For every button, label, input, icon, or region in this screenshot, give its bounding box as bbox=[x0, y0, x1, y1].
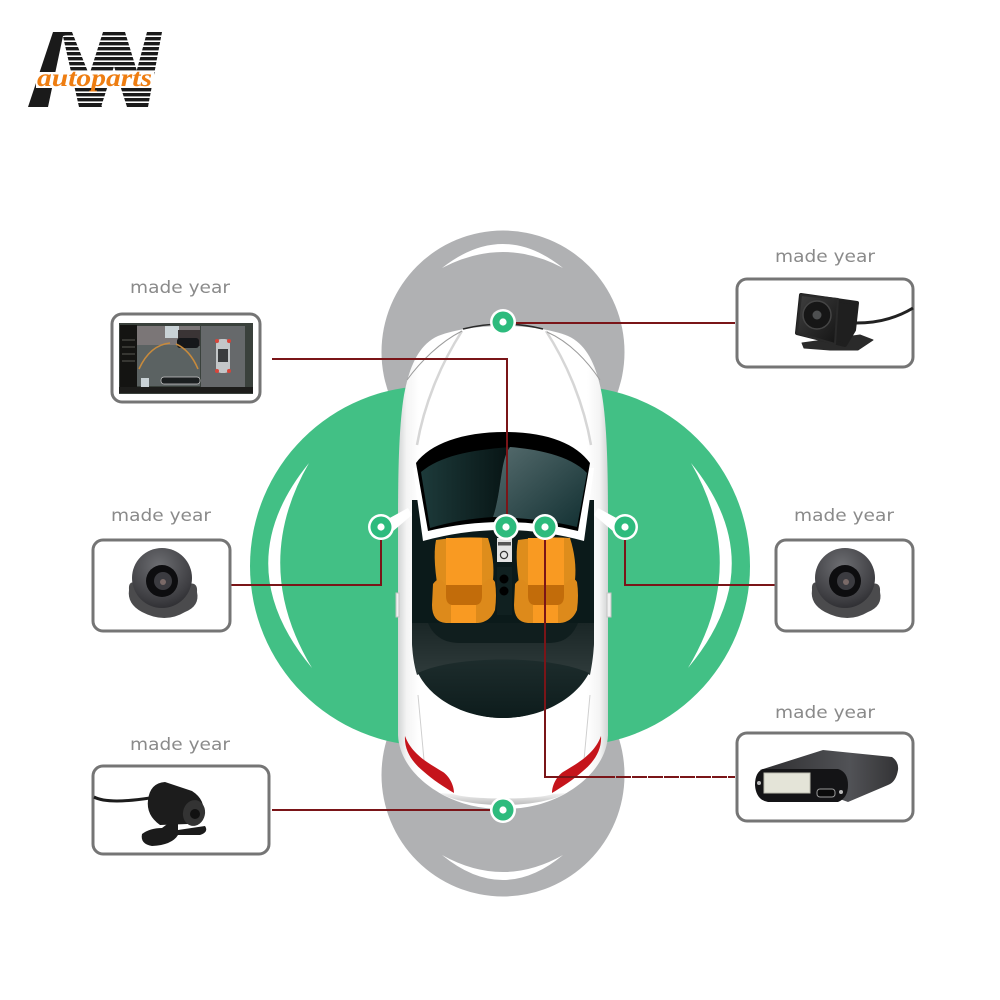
side markers bbox=[396, 593, 611, 617]
logo letter left leg bbox=[28, 32, 72, 107]
rear bumper bbox=[440, 793, 566, 805]
marker rear camera bbox=[490, 797, 516, 823]
left crescent bbox=[268, 463, 312, 668]
rear deck bbox=[412, 623, 594, 675]
logo band bbox=[36, 72, 154, 88]
camera product bbox=[129, 548, 198, 618]
glass right bbox=[493, 447, 587, 527]
tonneau bbox=[418, 660, 589, 718]
logo striped letters bbox=[60, 32, 165, 107]
panel: right camera bbox=[776, 506, 913, 631]
camera product bbox=[797, 295, 913, 350]
side mirror left bbox=[386, 508, 412, 532]
label: made year bbox=[775, 247, 875, 267]
green coverage circles bbox=[250, 386, 750, 746]
top crescent bbox=[442, 244, 563, 268]
panel: control box bbox=[737, 703, 913, 821]
marker left camera bbox=[368, 514, 394, 540]
left tail light bbox=[405, 736, 454, 793]
marker right camera bbox=[612, 514, 638, 540]
gray coverage circles bbox=[382, 230, 624, 896]
hood creases bbox=[407, 324, 600, 760]
panel: rear camera bbox=[93, 735, 269, 854]
panel: left camera bbox=[93, 506, 230, 631]
label: made year bbox=[130, 735, 230, 755]
frame bbox=[737, 279, 913, 367]
rear shelf bbox=[428, 623, 578, 643]
panel: front camera bbox=[737, 247, 913, 367]
connector lines bbox=[231, 323, 775, 810]
frame bbox=[737, 733, 913, 821]
frame bbox=[93, 766, 269, 854]
logo wordmark: autoparts bbox=[37, 65, 152, 92]
frame bbox=[93, 540, 230, 631]
marker front camera bbox=[490, 309, 516, 335]
marker monitor bbox=[493, 514, 519, 540]
car top view bbox=[386, 324, 620, 809]
label: made year bbox=[775, 703, 875, 723]
center stack bbox=[497, 538, 512, 615]
glass left bbox=[421, 447, 510, 528]
right crescent bbox=[688, 463, 732, 668]
interior tub bbox=[412, 500, 594, 718]
white windscreen frame bbox=[413, 468, 594, 541]
marker control box bbox=[532, 514, 558, 540]
bottom crescent bbox=[442, 855, 563, 880]
right tail light bbox=[552, 736, 601, 793]
logo bbox=[28, 32, 165, 107]
camera product bbox=[812, 548, 880, 618]
frame bbox=[112, 314, 260, 402]
left seat bbox=[432, 537, 496, 623]
label: made year bbox=[130, 278, 230, 298]
side mirror right bbox=[594, 508, 620, 532]
box product bbox=[755, 750, 898, 802]
screen bbox=[119, 323, 253, 394]
frame bbox=[776, 540, 913, 631]
label: made year bbox=[111, 506, 211, 526]
label: made year bbox=[794, 506, 894, 526]
panel: monitor bbox=[112, 278, 260, 402]
camera product bbox=[94, 782, 207, 846]
windscreen surround bbox=[416, 432, 590, 531]
right seat bbox=[514, 537, 578, 623]
car body bbox=[398, 326, 608, 809]
